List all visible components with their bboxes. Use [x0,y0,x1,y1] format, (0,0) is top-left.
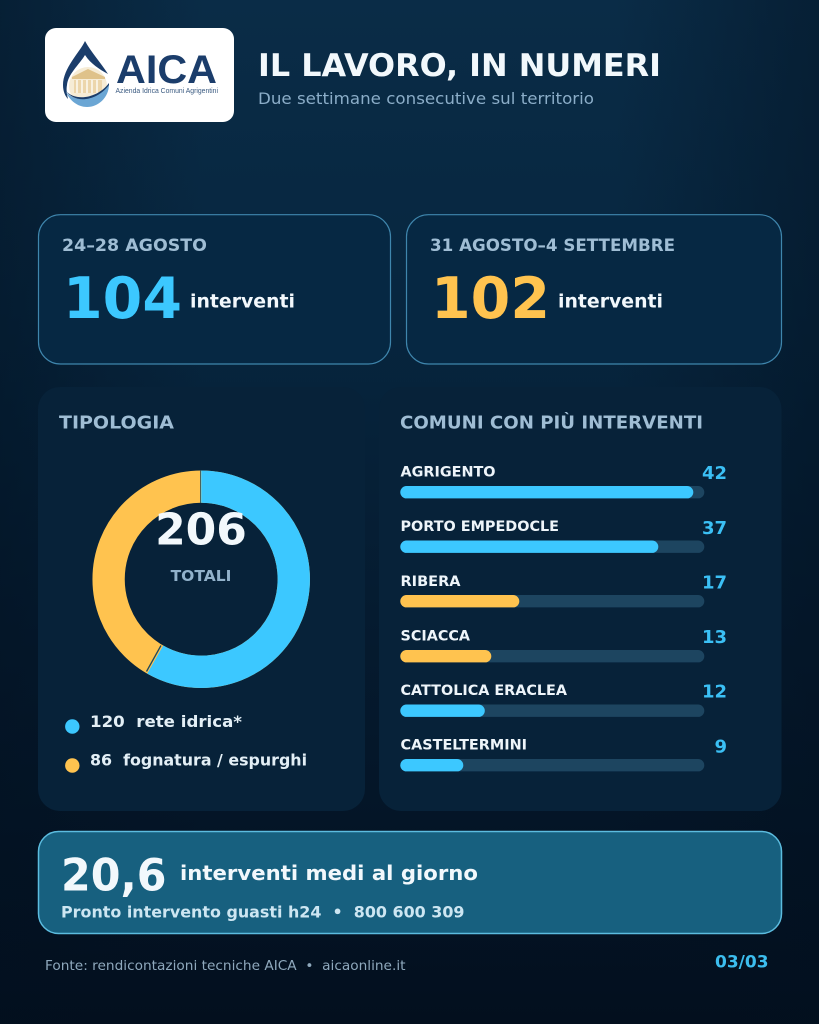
legend: fognatura: 86 fognatura / espurghi [90,751,307,770]
bar: Ribera: RIBERA [400,574,461,590]
week 1 date: 24–28 AGOSTO [62,236,207,255]
week 1 value: 104 [63,266,182,332]
week 2 value: 102 [431,266,550,332]
bar: Porto Empedocle: 37 [702,518,727,539]
bar: Ribera [400,572,727,607]
callout contact: Pronto intervento guasti h24 • 800 600 309 [61,903,464,922]
panel: tipologia [38,387,365,811]
source note: Fonte: rendicontazioni tecniche AICA • aicaonline.it [45,959,405,974]
title: IL LAVORO, IN NUMERI [258,48,661,84]
bar: Cattolica Eraclea: 12 [702,682,727,703]
bar: Agrigento: 42 [702,463,727,484]
bar: Cattolica Eraclea: CATTOLICA ERACLEA [400,683,567,699]
bar: Agrigento: AGRIGENTO [400,465,496,481]
week 2 date: 31 AGOSTO–4 SETTEMBRE [430,236,675,255]
logo card [45,28,234,122]
bar: Casteltermini: CASTELTERMINI [400,737,527,753]
bar: Sciacca: SCIACCA [400,628,470,644]
panel: week 2 [406,215,782,364]
panel: comuni [379,387,782,811]
heading: comuni: COMUNI CON PIÙ INTERVENTI [400,412,703,434]
bar: Porto Empedocle [400,518,727,553]
logo tagline: Azienda Idrica Comuni Agrigentini [116,88,218,95]
bar: Porto Empedocle: PORTO EMPEDOCLE [400,519,559,535]
panel: week 1 [38,215,390,364]
week 1 unit: interventi [190,292,295,312]
page number: 03/03 [715,953,769,973]
week 2 unit: interventi [558,292,663,312]
bar: Sciacca [400,627,727,662]
logo wordmark: AICA [116,48,217,92]
bar: Cattolica Eraclea [400,682,727,717]
bar: Ribera: 17 [702,572,727,593]
callout value: 20,6 [61,851,166,902]
callout: daily average [38,832,782,934]
heading: tipologia: TIPOLOGIA [59,412,174,434]
bar: Casteltermini [400,736,727,771]
donut total value: 206 [155,504,247,555]
callout label: interventi medi al giorno [180,861,478,885]
icon: water drop with temple [63,41,109,107]
bar: Agrigento [400,463,727,498]
bar: Casteltermini: 9 [714,736,727,757]
bar: Sciacca: 13 [702,627,727,648]
donut total label: TOTALI [171,567,231,585]
subtitle: Due settimane consecutive sul territorio [258,89,594,108]
legend: rete idrica: 120 rete idrica* [90,712,243,731]
donut chart [109,470,294,672]
